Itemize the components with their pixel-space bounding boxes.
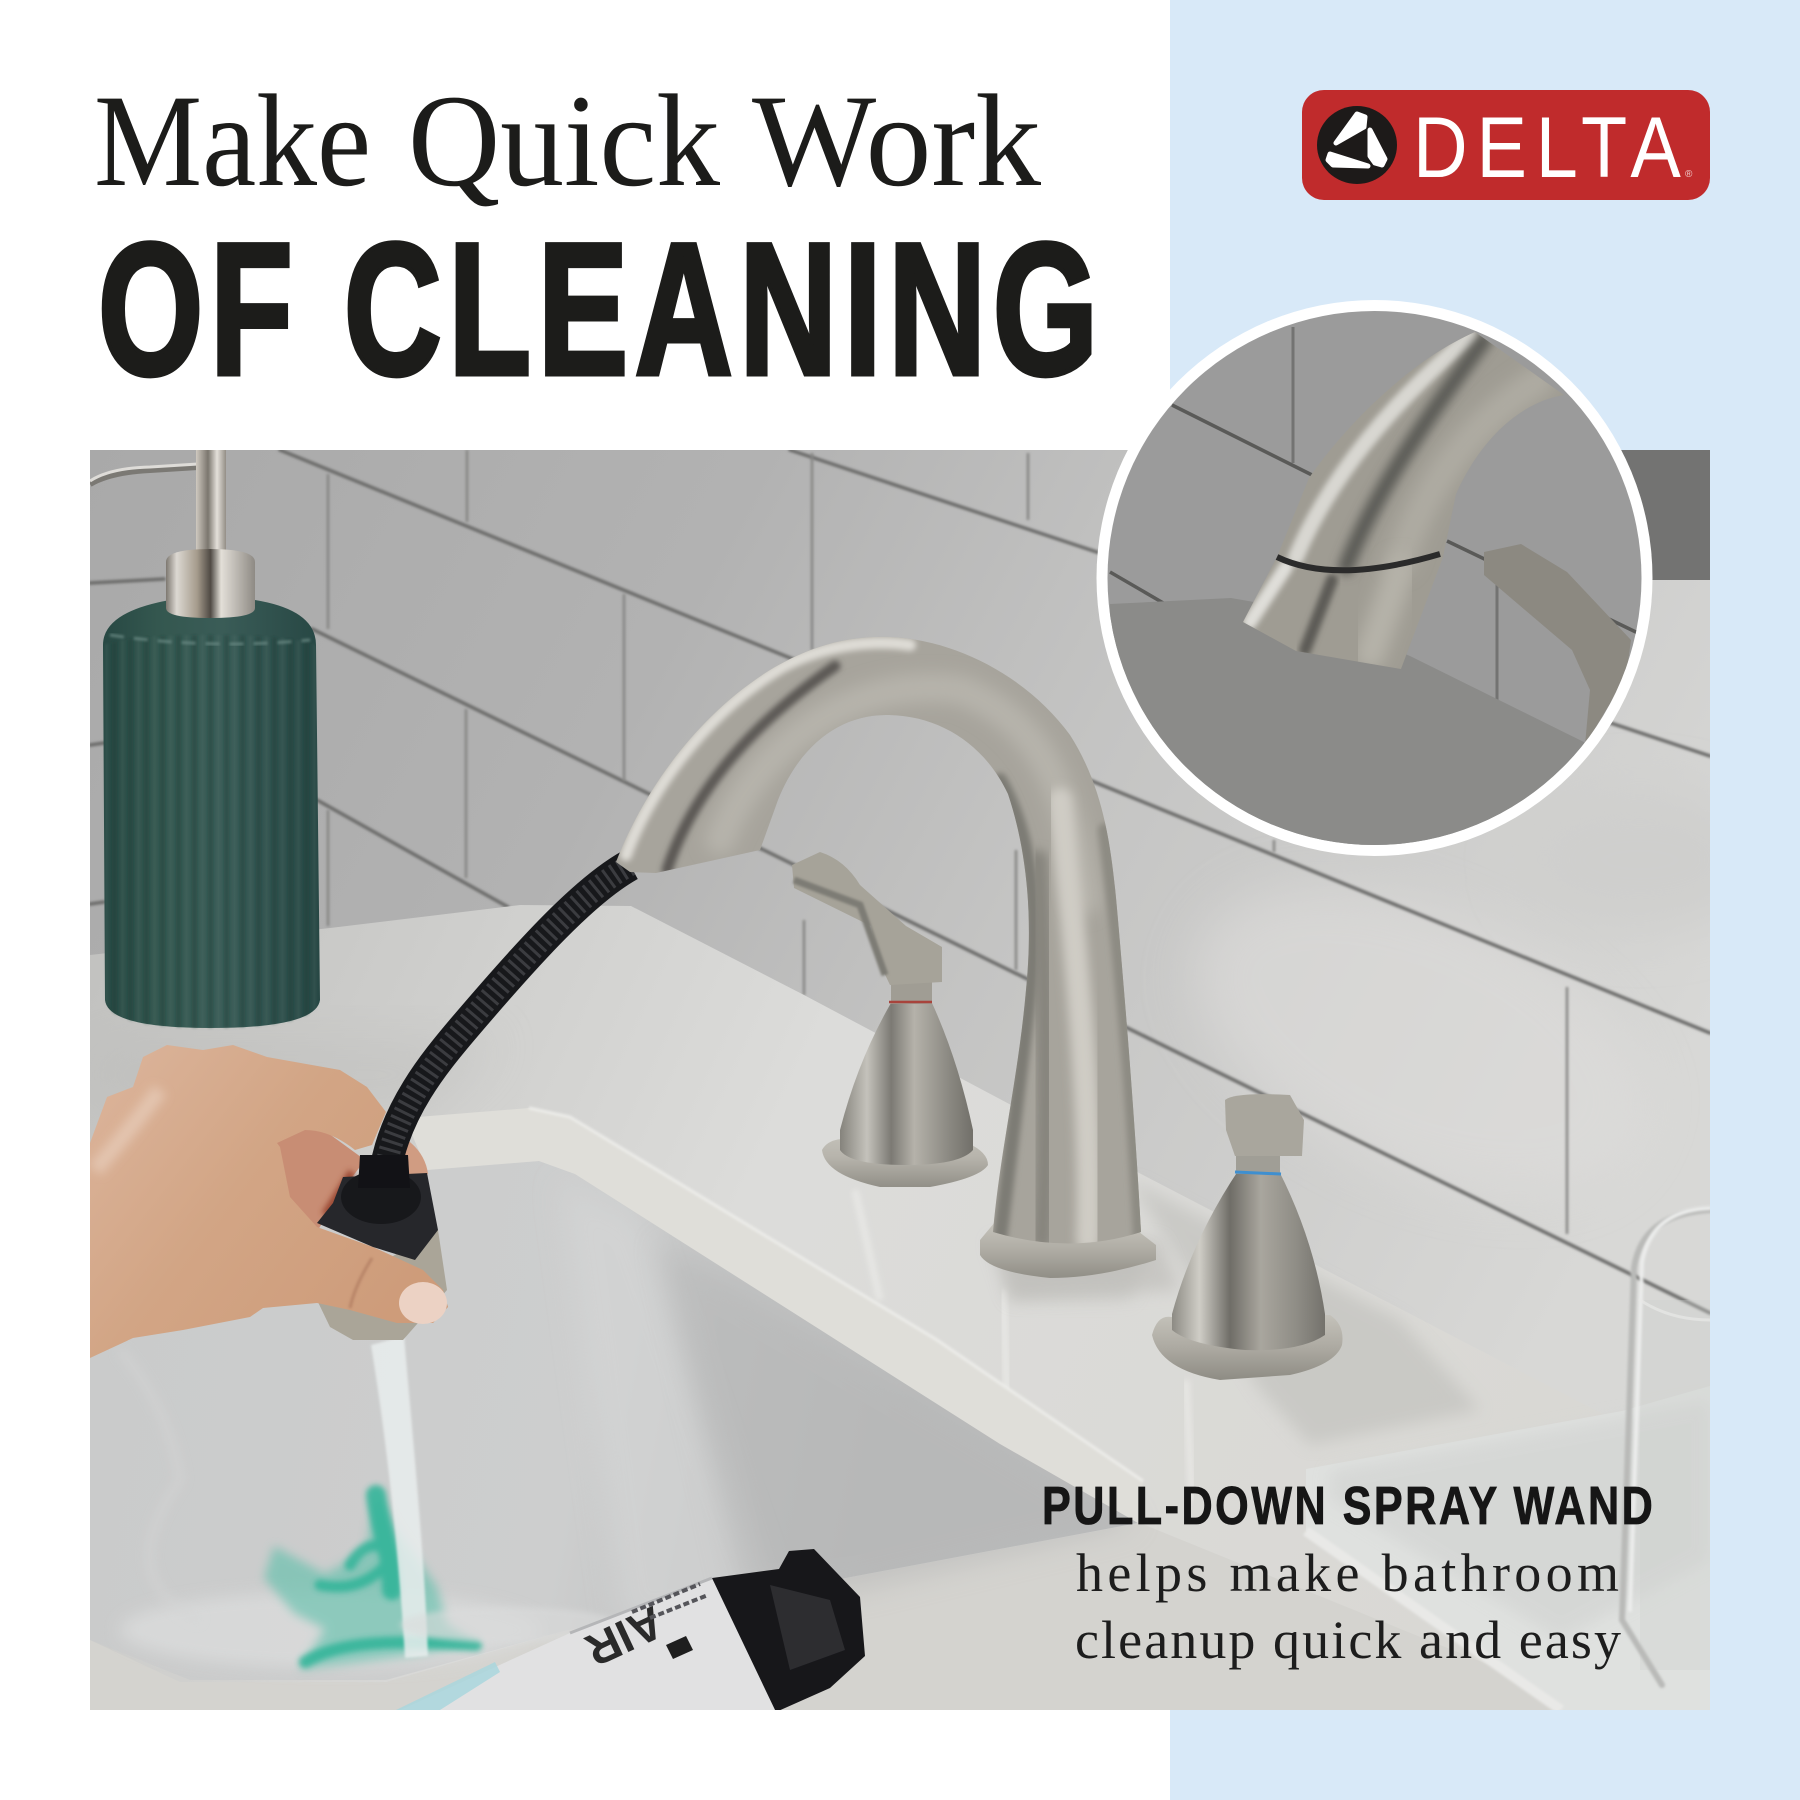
spout base (980, 1222, 1156, 1278)
right handle cone (1172, 1171, 1325, 1350)
black label block (666, 1636, 693, 1659)
title line one: serif: Quick (408, 67, 720, 214)
right handle lever (1225, 1094, 1304, 1156)
inset white ring (1096, 300, 1652, 856)
inset seal ring (1277, 554, 1440, 570)
rim edge highlight (529, 1108, 1143, 1481)
green liquid swirl (264, 1491, 478, 1670)
thumb crease (350, 1258, 372, 1308)
sink basin (278, 1166, 1138, 1680)
inset handle (1484, 544, 1631, 745)
column dark band (1038, 860, 1046, 1240)
title line one: serif: Work (752, 67, 1041, 214)
hose connector (358, 1155, 410, 1188)
pump stem (196, 450, 226, 552)
inset circle: spout close-up (1090, 295, 1660, 880)
soap dispenser (90, 450, 320, 1028)
icon: Delta emblem (1317, 106, 1397, 184)
arc body light (720, 688, 1085, 900)
panel: light blue column (1170, 0, 1800, 1800)
left handle neck (891, 982, 932, 1004)
wand collar (341, 1170, 421, 1224)
glass tumbler (1622, 1208, 1710, 1685)
foreground counter section (436, 1559, 1046, 1710)
inset image (1090, 295, 1660, 880)
title line two: bold: OF CLEANING (98, 204, 1105, 414)
holographic sticker (396, 1662, 500, 1710)
logo background (1302, 90, 1710, 200)
tray on counter (1306, 1386, 1710, 1710)
tube label text: AIR (578, 1596, 672, 1677)
tube body (440, 1580, 775, 1710)
wall tiles (90, 450, 1710, 1414)
right handle neck (1236, 1152, 1280, 1174)
hand shape (90, 1045, 448, 1358)
left handle base (822, 1139, 988, 1187)
lever shading (794, 880, 885, 975)
foam at drain (400, 1607, 620, 1643)
blue ring (1235, 1172, 1281, 1174)
tube cap (712, 1549, 865, 1712)
back finger behind hose (395, 1135, 428, 1176)
palm shadow (325, 1172, 352, 1215)
right handle base (1152, 1315, 1342, 1380)
cap highlight (770, 1585, 845, 1670)
spout dark streak (667, 666, 835, 870)
counter shadows and reflections (90, 1040, 1480, 1500)
callout line one: helps make bathroom (1076, 1543, 1619, 1603)
inner palm (268, 1125, 365, 1232)
braided hose (385, 865, 630, 1172)
column bright band (1060, 800, 1089, 1240)
column outer shade (1105, 830, 1140, 1240)
spray wand silver base (317, 1230, 447, 1340)
tube upper edge (570, 1578, 712, 1633)
ribbed bottle (103, 600, 320, 1028)
spout body (600, 620, 1160, 1260)
pump arm (90, 464, 198, 484)
swirl strands (305, 1495, 476, 1662)
left handle cone (840, 1003, 973, 1165)
red ring (889, 1001, 932, 1003)
inset spout (1230, 320, 1580, 680)
faucet (600, 620, 1342, 1380)
column dark inner edge (1000, 780, 1033, 1240)
swirl mass (264, 1491, 478, 1670)
sink rim lip (405, 1108, 1143, 1523)
logo: Delta badge (1302, 90, 1710, 200)
small label lines (632, 1584, 708, 1618)
callout text (1042, 1477, 1655, 1670)
countertop (90, 905, 1348, 1682)
metal collar (166, 549, 255, 618)
title line one: serif (94, 67, 1041, 214)
tube of cleaner (396, 1549, 865, 1712)
thumb nail (399, 1282, 447, 1324)
left handle lever (792, 852, 942, 985)
spout top edge light (626, 643, 910, 855)
callout line two: cleanup quick and easy (1075, 1610, 1621, 1670)
title (94, 67, 1105, 414)
basin shading (120, 1180, 1138, 1668)
photo: bathroom sink scene (90, 450, 1760, 1712)
hand holding wand (90, 1045, 448, 1358)
faucet shadow (990, 1240, 1180, 1300)
inset countertop (1100, 598, 1600, 880)
logo wordmark: DELTA (1413, 101, 1690, 196)
registered mark: ® (1685, 169, 1693, 180)
knuckle highlight (95, 1090, 160, 1170)
wand black head (317, 1173, 438, 1260)
title line one: serif: Make (94, 67, 371, 214)
callout heading: PULL-DOWN SPRAY WAND (1042, 1477, 1655, 1536)
water stream (371, 1335, 428, 1658)
